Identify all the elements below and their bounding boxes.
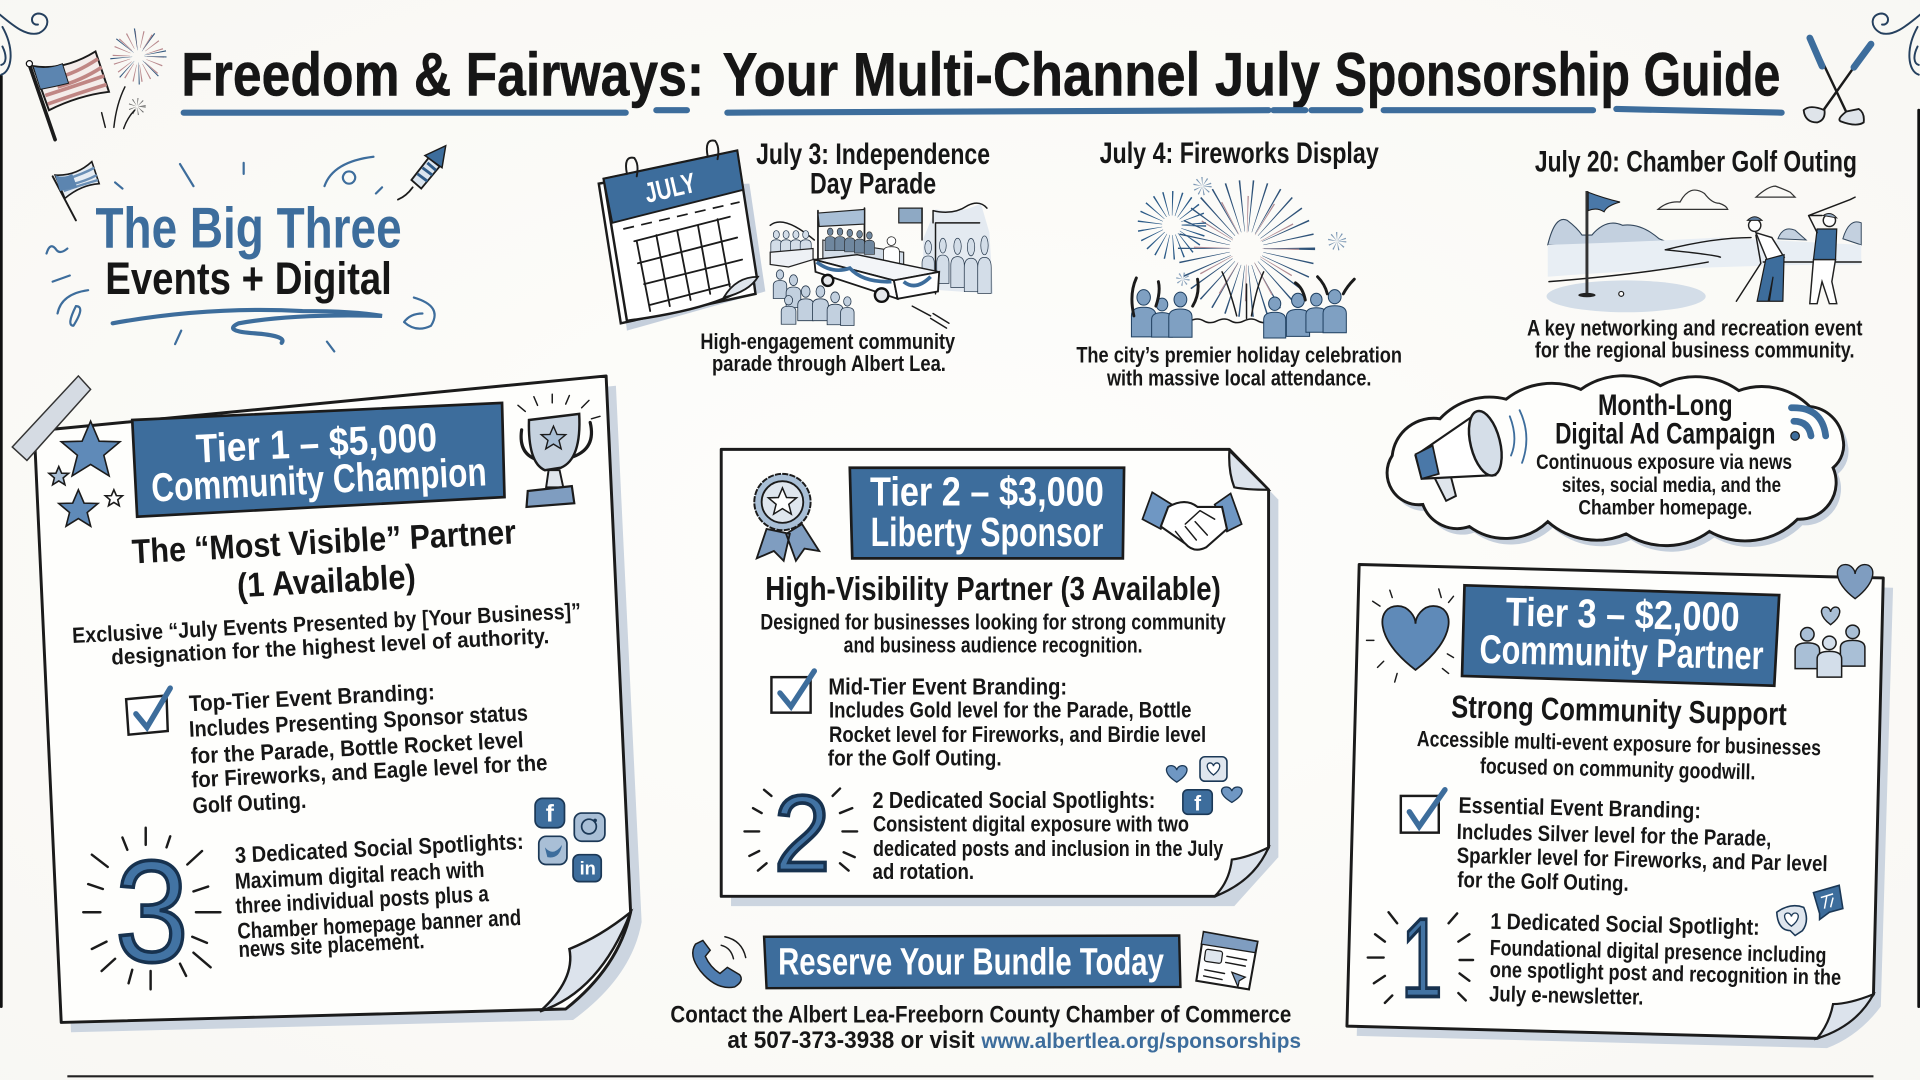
paper shadow: [44, 386, 642, 1032]
benefit: social spotlight: 1 Dedicated Social Spotlight:: [1490, 908, 1760, 940]
event: July 20 golf: [1527, 145, 1863, 363]
CTA banner text: Reserve Your Bundle Today: [778, 942, 1164, 984]
big number 1: [1368, 895, 1473, 1021]
icon: signal: [1791, 408, 1826, 440]
decorative sketch marks: [47, 157, 435, 351]
partner heading: Strong Community Support: [1451, 688, 1787, 732]
benefit: social spotlight: [1489, 908, 1841, 1010]
description line 2: designation for the highest level of authority.: [111, 623, 550, 670]
benefit: social spotlight: one spotlight post and recognition in the: [1490, 957, 1841, 990]
paper: [721, 449, 1269, 896]
benefit: event branding: Includes Silver level for the Parade,: [1456, 819, 1772, 851]
description line 2: and business audience recognition.: [844, 633, 1142, 658]
icon: rosette: [754, 474, 819, 561]
banner text line 2: Liberty Sponsor: [871, 509, 1103, 555]
icon: check box: [771, 671, 814, 713]
paper shadow: [731, 459, 1278, 906]
event heading: July 4: Fireworks Display: [1100, 137, 1379, 170]
banner text: Tier 2 – $3,000: [870, 469, 1104, 515]
benefit: social spotlight: Foundational digital presence including: [1490, 935, 1827, 968]
benefit: event branding: Includes Gold level for the Parade, Bottle: [829, 698, 1191, 723]
call to action: [670, 932, 1301, 1054]
tier banner: [1462, 585, 1779, 686]
event description: High-engagement community: [700, 329, 956, 354]
icon: stars: [49, 421, 122, 526]
benefit: social spotlights: dedicated posts and inclusion in the July: [873, 836, 1224, 861]
icon: calendar: JULY: [642, 167, 699, 209]
big number 3: [83, 828, 220, 992]
banner text: Tier 1 – $5,000: [195, 414, 438, 472]
benefit: event branding: Rocket level for Fireworks, and Birdie level: [829, 722, 1206, 747]
page curl: [1215, 847, 1269, 896]
icon: community people: [1795, 625, 1865, 677]
title: Your Multi-Channel July: [722, 41, 1320, 109]
icon: social media badges: in: [580, 857, 596, 878]
tier banner: [850, 468, 1124, 558]
partner heading: The “Most Visible” Partner: [131, 513, 517, 572]
icon: social reactions: [1166, 757, 1242, 816]
page curl: [540, 912, 631, 1011]
benefit: social spotlights: 3 Dedicated Social Spotlights:: [234, 828, 524, 868]
benefit: social spotlights: 2 Dedicated Social Spotlights:: [872, 787, 1155, 813]
icon: heart corner: [1837, 565, 1873, 599]
description: Exclusive “July Events Presented by [Your Business]”: [72, 598, 582, 648]
icon: trophy: [518, 394, 600, 507]
illustration: golf scene: [1547, 186, 1861, 312]
benefit: event branding: Sparkler level for Fireworks, and Par level: [1456, 843, 1828, 876]
page curl: [1817, 994, 1873, 1038]
title: Sponsorship Guide: [1335, 41, 1780, 109]
panel: tier 3: [1347, 564, 1893, 1048]
icon: small flag: [53, 162, 99, 220]
paper: [34, 376, 631, 1022]
event: July 4 fireworks: [1076, 137, 1402, 391]
icon: American flag: [26, 51, 109, 140]
bottom rule: [67, 1075, 1873, 1077]
contact text line 2: at 507-373-3938 or visit: [727, 1027, 975, 1054]
description: Accessible multi-event exposure for businesses: [1417, 726, 1821, 760]
benefit: social spotlights: Consistent digital exposure with two: [873, 811, 1189, 836]
CTA banner: [764, 936, 1180, 988]
icon: social bubbles: [1777, 885, 1843, 936]
benefit: event branding: for the Parade, Bottle Rocket level: [190, 726, 524, 769]
panel: digital ad campaign cloud: [1387, 376, 1849, 552]
icon: browser window: [1196, 932, 1258, 989]
icon: crossed golf clubs: [1804, 38, 1871, 125]
benefit: social spotlights: Chamber homepage banner and: [237, 904, 522, 944]
title: [181, 41, 1780, 109]
website link: www.albertlea.org/sponsorships: [980, 1030, 1301, 1053]
illustration: parade float: [770, 203, 993, 328]
icon: handshake: [1142, 492, 1242, 550]
icon: phone: [693, 937, 746, 988]
figure: swinging golfer: [1809, 197, 1855, 304]
benefit: social spotlights: [234, 828, 524, 962]
big number 2: 2: [774, 773, 830, 894]
benefit: event branding: Top-Tier Event Branding:: [188, 678, 435, 716]
heading: The Big Three: [47, 146, 446, 351]
event description: A key networking and recreation event: [1527, 316, 1863, 341]
event description line 2: with massive local attendance.: [1106, 366, 1371, 391]
event description line 2: parade through Albert Lea.: [712, 351, 946, 376]
benefit: social spotlight: July e-newsletter.: [1489, 981, 1644, 1010]
hand-drawn swash: [113, 310, 382, 343]
benefit: event branding: [1456, 792, 1828, 896]
partner heading line 2: (1 Available): [236, 558, 417, 605]
benefit: social spotlights: Maximum digital reach with: [234, 856, 485, 894]
illustration: fireworks and crowd: [1131, 181, 1354, 338]
cloud shadow: [1392, 382, 1849, 552]
icon: check box: [126, 688, 170, 735]
panel: tier 1: [12, 376, 642, 1032]
benefit: event branding: for the Golf Outing.: [828, 745, 1002, 770]
benefit: event branding: Essential Event Branding:: [1458, 792, 1701, 823]
icon: social reactions: f: [1194, 793, 1201, 816]
cloud outline: [1387, 376, 1844, 546]
icon: rocket: [398, 146, 446, 200]
benefit: event branding: Includes Presenting Sponsor status: [188, 699, 528, 742]
icon: heart with rays: [1367, 589, 1453, 682]
tier banner: [132, 403, 504, 517]
icon: calendar: [599, 141, 765, 331]
event heading: July 3: Independence: [756, 138, 990, 171]
paper: [1347, 564, 1883, 1038]
big number 2: [744, 773, 857, 894]
cloud heading: Month-Long: [1598, 389, 1733, 422]
cloud body line 2: sites, social media, and the: [1562, 474, 1781, 497]
benefit: event branding: Mid-Tier Event Branding:: [828, 673, 1067, 699]
benefit: event branding: for Fireworks, and Eagle level for the: [191, 749, 548, 792]
big number 1: 1: [1401, 895, 1442, 1021]
cloud body line 3: Chamber homepage.: [1578, 496, 1752, 519]
banner text line 2: Community Champion: [150, 448, 488, 511]
panel: tier 2: [721, 449, 1278, 906]
cloud body: Continuous exposure via news: [1536, 451, 1792, 474]
event description line 2: for the regional business community.: [1535, 338, 1854, 363]
big number 3: 3: [115, 830, 189, 992]
icon: top fireworks: [102, 39, 156, 129]
partner heading: High-Visibility Partner (3 Available): [765, 571, 1221, 608]
icon: social media badges: f: [546, 801, 555, 828]
benefit: social spotlights: [872, 787, 1224, 884]
benefit: event branding: Golf Outing.: [192, 787, 307, 818]
benefit: event branding: for the Golf Outing.: [1457, 867, 1629, 896]
benefit: social spotlights: three individual posts plus a: [235, 880, 490, 919]
figure: putting golfer: [1736, 217, 1784, 301]
banner text line 2: Community Partner: [1479, 626, 1764, 678]
event: July 3 parade: [599, 138, 993, 376]
subheading: Events + Digital: [105, 253, 392, 304]
benefit: social spotlights: news site placement.: [238, 927, 425, 962]
heading text: The Big Three: [96, 196, 402, 260]
cloud heading line 2: Digital Ad Campaign: [1555, 417, 1776, 450]
event heading line 2: Day Parade: [810, 167, 936, 200]
tape: [12, 376, 91, 460]
benefit: social spotlights: ad rotation.: [872, 859, 974, 884]
event description: The city’s premier holiday celebration: [1076, 342, 1402, 367]
benefit: event branding: [188, 678, 548, 818]
icon: social media badges: [535, 798, 605, 882]
banner text: Tier 3 – $2,000: [1505, 589, 1740, 640]
page fold: [1229, 451, 1269, 490]
contact text: Contact the Albert Lea-Freeborn County Chamber of Commerce: [670, 1001, 1291, 1028]
title: Freedom & Fairways:: [181, 41, 704, 109]
icon: check box: [1401, 790, 1445, 833]
description line 2: focused on community goodwill.: [1480, 753, 1756, 784]
benefit: event branding: [828, 673, 1206, 770]
icon: small heart: [1821, 607, 1840, 625]
icon: megaphone: [1416, 408, 1526, 501]
title underline: [184, 109, 1782, 113]
description: Designed for businesses looking for strong community: [760, 609, 1226, 634]
paper shadow: [1357, 574, 1893, 1048]
